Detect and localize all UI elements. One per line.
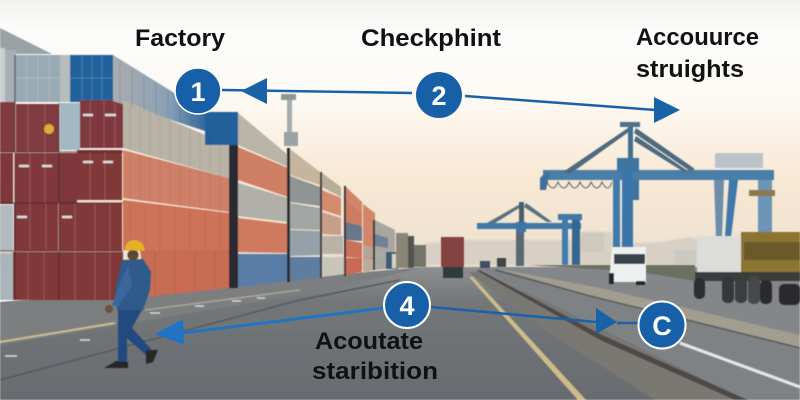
- radio mast: [281, 94, 298, 146]
- step 2 badge: [416, 72, 462, 118]
- apron lines: [0, 323, 115, 342]
- far end: [396, 233, 408, 268]
- far-left rear stack: [0, 28, 52, 102]
- step 4 badge: [384, 282, 430, 328]
- column 1: [0, 48, 5, 102]
- sky background: [0, 0, 800, 270]
- stack separators: [0, 55, 123, 300]
- rail: [476, 270, 748, 400]
- yellow placard: [44, 124, 54, 134]
- legs: [118, 308, 151, 363]
- section 375 to 395: [375, 220, 395, 270]
- boots: [104, 361, 128, 368]
- label: Acoutate staribition: [312, 328, 438, 385]
- column 3: [60, 103, 80, 150]
- label: Acoutate staribition: staribition: [312, 358, 438, 385]
- blue box on stack: [205, 112, 238, 145]
- section 238 to 288: [238, 113, 288, 167]
- label: Acoutate staribition: Acoutate: [315, 328, 423, 355]
- section 362 to 375: [363, 204, 375, 273]
- arrow: from checkpoint to resource: [465, 96, 680, 123]
- white truck cab: [609, 247, 646, 285]
- step 4 badge: 4: [399, 291, 415, 321]
- concrete barrier: [527, 265, 695, 281]
- long side faces: [113, 55, 205, 131]
- column 2: [15, 55, 60, 102]
- median strip: [495, 268, 800, 347]
- step 1 badge: [175, 68, 221, 114]
- torso: [115, 259, 151, 310]
- small distant cars: [480, 258, 506, 268]
- hard hat: [125, 240, 145, 251]
- section 346 to 362: [346, 187, 362, 212]
- left apron lighter: [0, 267, 425, 345]
- label: Checkphint: Checkphint: [361, 25, 501, 52]
- step C badge: [638, 302, 686, 348]
- head: [128, 250, 138, 260]
- section 290 to 320: [290, 149, 320, 185]
- arrow: from step 4 to step C: [431, 307, 638, 334]
- arrow: from checkpoint to factory: [222, 78, 412, 104]
- step 1 badge: 1: [190, 77, 206, 107]
- arrow: from step 4 to worker: [155, 308, 384, 345]
- corrugation lines: [130, 103, 220, 295]
- container stacks: [0, 28, 426, 300]
- white labels: [17, 115, 116, 217]
- right side cargo truck: [694, 232, 800, 305]
- step 2 badge: 2: [431, 81, 447, 111]
- door bars: [27, 55, 115, 300]
- label: Factory: Factory: [135, 25, 226, 52]
- white lane line: [680, 343, 800, 387]
- track bed: [468, 272, 745, 400]
- small gantry crane: [477, 202, 582, 266]
- large gantry crane: [540, 122, 775, 248]
- road ground: [0, 267, 800, 400]
- distant truck: [441, 237, 464, 278]
- arm: [112, 265, 132, 307]
- label: Accouurce struights: Accouurce: [636, 24, 759, 51]
- distant haze buildings: [425, 232, 800, 265]
- section 322 to 344: [322, 173, 341, 197]
- step C badge: C: [652, 311, 672, 341]
- label: Accouurce struights: [636, 24, 759, 83]
- right carriageway: [478, 268, 800, 400]
- worker figure: [104, 240, 158, 368]
- label: Accouurce struights: struights: [636, 56, 744, 83]
- upper right lane: [490, 267, 800, 337]
- yellow lane line: [469, 277, 586, 400]
